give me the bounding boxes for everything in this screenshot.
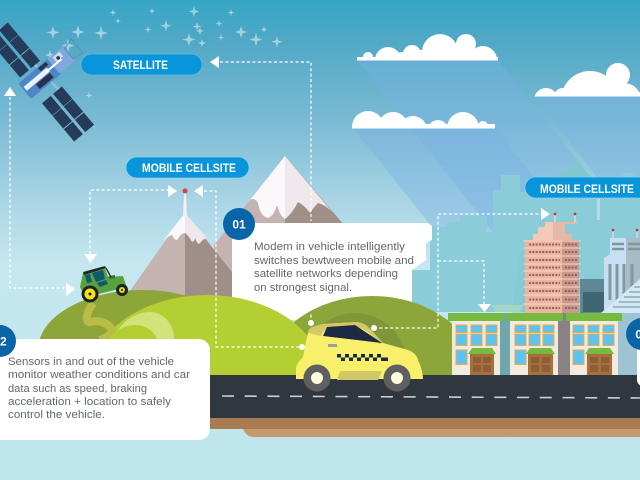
taxi [296,322,423,392]
panel: step 02 [0,339,210,440]
satellite spar [0,28,95,128]
low pale building [492,305,640,375]
mountain large [214,156,350,300]
lower solar panel [42,86,94,142]
taxi door handle [328,344,337,347]
label: mobile cellsite left: MOBILE CELLSITE [142,163,236,175]
cellsite mast [182,188,188,216]
arrowheads [4,56,550,312]
taxi sill [337,371,382,380]
badge 01 [223,208,255,240]
cloud top [357,34,498,60]
cloud right [534,63,640,96]
text: step 02: Sensors in and out of the vehicle [8,356,174,368]
upper solar panel [0,22,40,78]
road [200,375,640,418]
text: step 01: switches bewtween mobile and [254,255,414,267]
badge 03 [626,318,640,350]
connection dots [299,344,305,350]
satellite body [18,39,84,99]
text: step 02: data such as speed, braking [8,383,147,395]
skyscraper pink [523,213,581,313]
text: step 01: satellite networks depending [254,268,398,280]
bright hill [115,295,308,375]
townhouse 1 [448,313,504,375]
stars [45,6,283,99]
label: satellite [81,54,202,75]
dark hill left [38,290,246,410]
text: step 02: acceleration + location to safely [8,396,172,408]
text: step 01: Modem in vehicle intelligently [254,241,406,253]
white text panel 01 [232,223,432,320]
tractor [80,266,128,302]
shaded mound behind car [324,313,404,349]
skyline highlights [510,160,602,330]
distant skyline [412,160,640,312]
glass wedge building [601,279,640,313]
clouds [352,34,640,128]
label: mobile cellsite left [126,157,249,178]
townhouse 2 [507,313,563,375]
label: satellite: SATELLITE [113,60,168,72]
mountain small [120,213,232,305]
label: mobile cellsite right [525,177,640,198]
townhouse 3 [566,313,622,375]
grey tower [604,229,640,312]
dark building [580,279,606,313]
text: step 01 [254,241,414,294]
bright inner hill [106,325,158,342]
winding tractor track [87,303,112,340]
connection lines [10,62,541,350]
badge 02 [0,325,16,357]
snow cap large [250,156,285,219]
ground strata [200,418,640,437]
text: step 02 [8,356,190,421]
badge 01: 01 [232,218,246,232]
cloud middle [352,111,495,128]
text: step 02: monitor weather conditions and car [8,369,190,381]
road centre line [222,396,640,398]
pale track on bright hill [113,312,174,342]
text: step 01: on strongest signal. [254,282,352,294]
text: step 02: control the vehicle. [8,409,105,421]
panel: step 03 edge [637,340,640,386]
taxi checker stripe [337,354,388,361]
taxi window [323,325,382,343]
cloud light beams [353,60,640,320]
dark hill right [294,296,452,375]
satellite [0,22,95,142]
taxi wheels [304,364,330,392]
tractor wheels [82,286,98,302]
